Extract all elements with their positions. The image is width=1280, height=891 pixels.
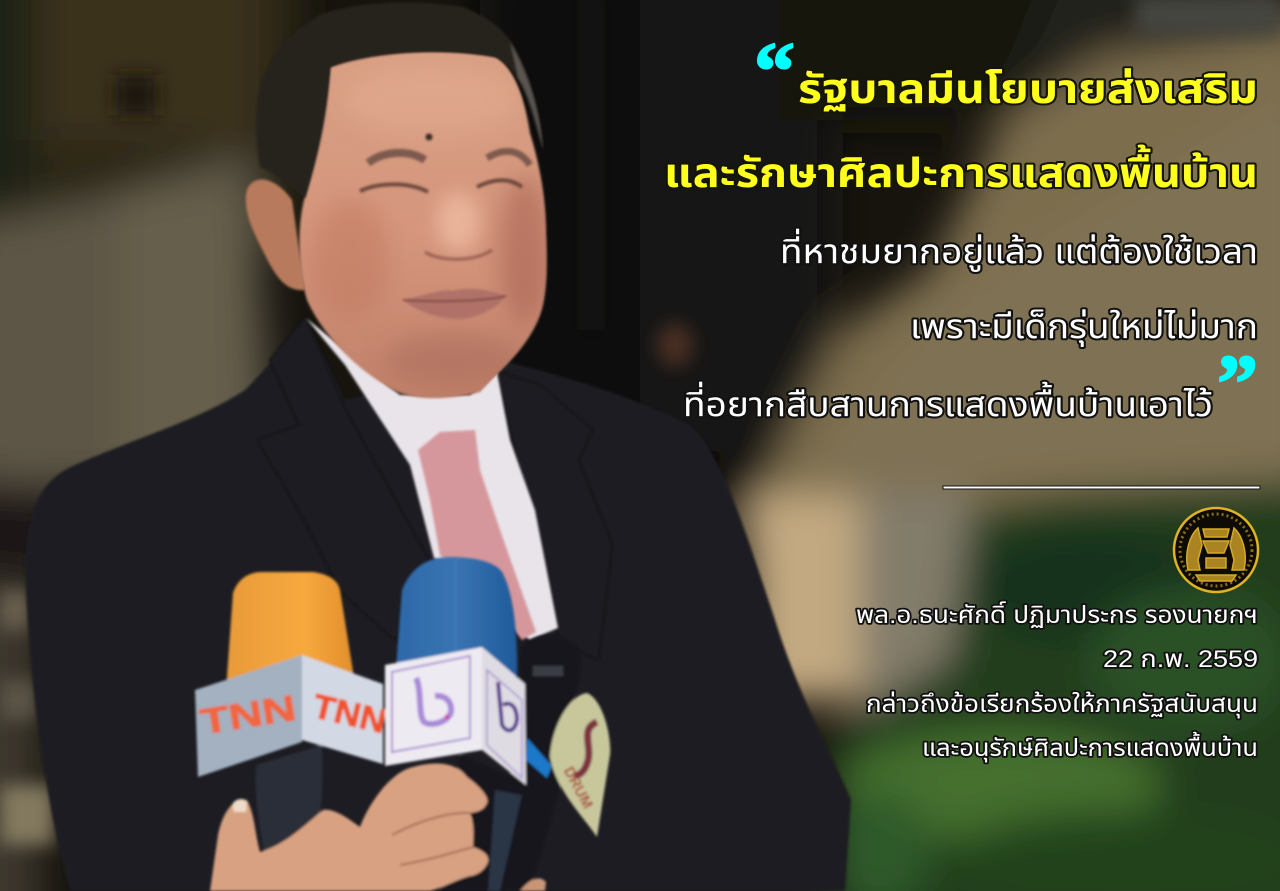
photo: man in dark suit bbox=[25, 2, 851, 891]
white line 5: ที่อยากสืบสานการแสดงพื้นบ้านเอาไว้ bbox=[683, 381, 1213, 424]
white line 3: ที่หาชมยากอยู่แล้ว แต่ต้องใช้เวลา bbox=[780, 228, 1258, 272]
white line 4: เพราะมีเด็กรุ่นใหม่ไม่มาก bbox=[910, 308, 1258, 347]
shirt collar and front bbox=[306, 318, 558, 640]
yellow line 2: และรักษาศิลปะการแสดงพื้นบ้าน bbox=[664, 144, 1258, 196]
Bright TV flag bbox=[385, 647, 482, 766]
microphones and hands: TNN bbox=[197, 687, 299, 742]
speaker name: พล.อ.ธนะศักดิ์ ปฏิมาประกร รองนายกฯ bbox=[856, 600, 1258, 629]
black mic bbox=[490, 635, 580, 890]
TNN flag bbox=[195, 655, 302, 777]
reporter hand bbox=[210, 763, 488, 891]
mic handle TNN bbox=[255, 745, 322, 852]
hair grey temple bbox=[510, 42, 543, 150]
icon: government emblem bbox=[1174, 508, 1258, 592]
attribution text bbox=[856, 600, 1258, 763]
microphones and hands bbox=[195, 557, 610, 891]
hair bbox=[256, 2, 543, 198]
quote text bbox=[664, 25, 1258, 429]
description line 1: กล่าวถึงข้อเรียกร้องให้ภาครัฐสนับสนุน bbox=[866, 690, 1258, 719]
facial features bbox=[360, 134, 530, 319]
yellow line 1: รัฐบาลมีนโยบายส่งเสริม bbox=[798, 66, 1258, 112]
suit jacket bbox=[25, 318, 851, 891]
decorative line bbox=[943, 486, 1260, 489]
ear bbox=[246, 179, 305, 290]
lapels bbox=[258, 318, 612, 660]
third flag round bbox=[550, 693, 610, 837]
closing quote mark: ” bbox=[1217, 338, 1258, 429]
microphones and hands: TNN bbox=[309, 687, 390, 741]
necktie bbox=[418, 430, 536, 640]
microphones and hands: DRUM bbox=[560, 764, 596, 812]
blue mic bbox=[395, 557, 517, 680]
blue strap bbox=[526, 738, 552, 778]
orange mic bbox=[226, 572, 356, 690]
face bbox=[299, 51, 551, 398]
opening quote mark: “ bbox=[754, 25, 795, 116]
description line 2: และอนุรักษ์ศิลปะการแสดงพื้นบ้าน bbox=[922, 731, 1258, 763]
date: 22 ก.พ. 2559 bbox=[1103, 646, 1258, 673]
handle dark bbox=[440, 755, 525, 891]
